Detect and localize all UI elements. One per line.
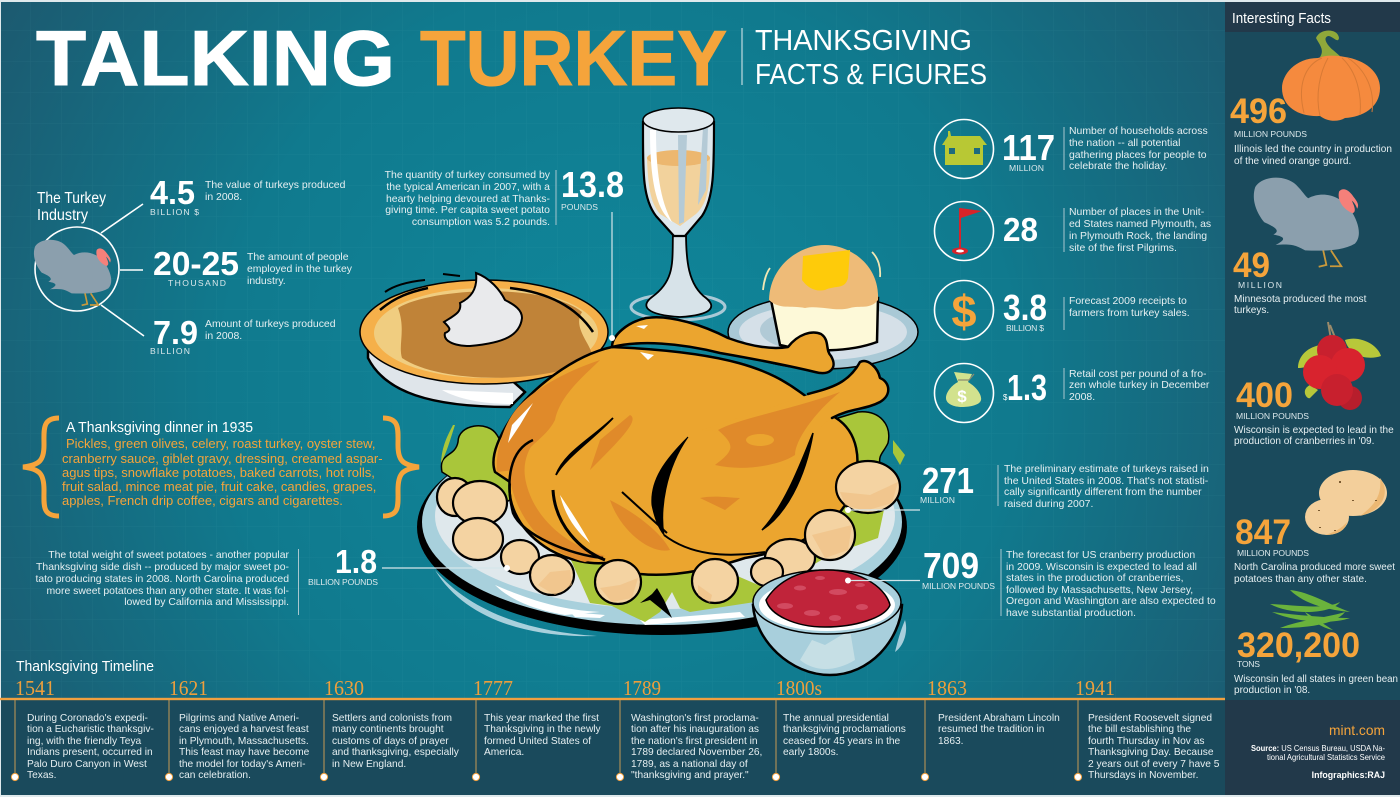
- icon: green beans: [1270, 590, 1350, 630]
- heading: A Thanksgiving dinner in 1935: [66, 419, 253, 436]
- stat: 3.8 billion dollars: [934, 280, 1190, 340]
- entry: 1941: fourth Thursday in Nov as: [1088, 736, 1204, 747]
- stat: 1.3 dollars per pound: Retail cost per pound of a fro-: [1069, 369, 1207, 380]
- stat: 1.8 billion pounds: 1.8: [335, 543, 377, 580]
- entry: 1941: 1941: [1075, 676, 1115, 700]
- stat: 271 million: The preliminary estimate of turkeys raised in: [1004, 464, 1209, 475]
- fact: 320,200 tons: production in '08.: [1234, 685, 1310, 696]
- stat: 7.9 billion: Amount of turkeys produced: [205, 319, 336, 330]
- icon: house: [934, 120, 994, 178]
- entry: 1630: [320, 676, 460, 781]
- stat: 4.5 billion: in 2008.: [205, 192, 242, 203]
- stat: 709 million pounds: states in the production of cranberries,: [1006, 573, 1184, 584]
- entry: 1630: 1630: [324, 676, 364, 700]
- entry: 1800s: thanksgiving proclamations: [783, 724, 906, 735]
- stat: 20-25 thousand: employed in the turkey: [247, 264, 353, 275]
- stat: 28 places named Plymouth: Number of places in the Unit-: [1069, 207, 1205, 218]
- icon: cranberry sauce bowl: [753, 570, 906, 675]
- fact: 847 million pounds: 847: [1235, 513, 1291, 552]
- entry: 1941: [1074, 676, 1220, 781]
- entry: 1863: 1863.: [938, 736, 964, 747]
- entry: 1863: 1863: [927, 676, 967, 700]
- entry: 1789: Washington's first proclama-: [631, 713, 759, 724]
- entry: 1777: 1777: [473, 676, 513, 700]
- stat: 4.5 billion: The value of turkeys produced: [205, 180, 346, 191]
- illustration: turkey dinner: [360, 108, 920, 675]
- source: tional Agricultural Statistics Service: [1267, 752, 1385, 762]
- icon: dollar sign: $: [951, 286, 977, 337]
- stat: 709 million pounds: have substantial production.: [1006, 608, 1136, 619]
- entry: 1777: This year marked the first: [484, 713, 599, 724]
- stat: 13.8 pounds: [385, 164, 624, 228]
- stat: 709 million pounds: 709: [923, 545, 979, 586]
- entry: 1800s: early 1800s.: [783, 747, 838, 758]
- icon: money bag: [934, 364, 994, 422]
- fact: 847 million pounds: MILLION POUNDS: [1237, 548, 1309, 558]
- stat: 271 million: [920, 460, 1209, 510]
- entry: 1621: This feast may have become: [179, 747, 310, 758]
- entry: 1541: [11, 676, 154, 781]
- entry: 1621: the model for today's Ameri-: [179, 759, 306, 770]
- stat: 13.8 pounds: consumption was 5.2 pounds.: [412, 217, 550, 228]
- menu text: agus tips, snowflake potatoes, baked carrots, hot rolls,: [62, 465, 375, 480]
- icon: dollar sign: [934, 280, 994, 340]
- icon: turkey in circle: [34, 204, 144, 336]
- entry: 1541: Palo Duro Canyon in West: [27, 759, 147, 770]
- entry: 1630: many continents brought: [332, 724, 444, 735]
- fact: 400 million pounds: [1234, 376, 1394, 447]
- stat: 1.8 billion pounds: lowed by California and Mississippi.: [124, 597, 289, 608]
- stat: 4.5 billion: 4.5: [150, 174, 195, 211]
- menu text: Pickles, green olives, celery, roast turkey, oyster stew,: [66, 436, 375, 451]
- fact: 320,200 tons: Wisconsin led all states in green bean: [1234, 674, 1398, 685]
- entry: 1941: the bill establishing the: [1088, 724, 1191, 735]
- right brace: [383, 418, 419, 516]
- stat: 709 million pounds: [922, 545, 1216, 619]
- icon: sweet potatoes: [1305, 470, 1387, 535]
- fact: 320,200 tons: [1234, 626, 1398, 696]
- stat: 1.8 billion pounds: BILLION POUNDS: [308, 577, 378, 587]
- stat: 271 million: MILLION: [920, 495, 955, 505]
- fact: 49 million: 49: [1233, 246, 1270, 285]
- panel: credits: [1225, 700, 1400, 795]
- stat: 20-25 thousand: THOUSAND: [168, 278, 226, 288]
- entry: 1541: tion a Eucharistic thanksgiv-: [27, 724, 154, 735]
- menu text: cranberry sauce, giblet gravy, dressing, creamed aspar-: [62, 451, 383, 466]
- fact: 320,200 tons: 320,200: [1237, 626, 1360, 665]
- source: [1251, 743, 1385, 762]
- entry: 1621: cans enjoyed a harvest feast: [179, 724, 309, 735]
- stat: 20-25 thousand: 20-25: [153, 245, 239, 282]
- title: Talking: TALKING: [36, 14, 395, 102]
- stat: 13.8 pounds: The quantity of turkey consumed by: [385, 170, 551, 181]
- stat: 1.8 billion pounds: [35, 543, 378, 615]
- entry: 1789: [616, 676, 762, 781]
- entry: 1789: 1789: [623, 676, 661, 700]
- callout line: 1.8 billion pounds: [382, 565, 510, 571]
- stat: 1.3 dollars per pound: 2008.: [1069, 392, 1095, 403]
- stat: 709 million pounds: MILLION POUNDS: [922, 581, 995, 591]
- entry: 1541: During Coronado's expedi-: [27, 713, 148, 724]
- stat: 3.8 billion dollars: 3.8: [1003, 287, 1047, 328]
- stat: 13.8 pounds: 13.8: [561, 164, 624, 205]
- stat: 3.8 billion dollars: Forecast 2009 receipts to: [1069, 296, 1187, 307]
- stat: 28 places named Plymouth: site of the first Pilgrims.: [1069, 243, 1177, 254]
- stat: 7.9 billion: BILLION: [150, 346, 190, 356]
- stat: 1.3 dollars per pound: $: [1003, 393, 1008, 402]
- stat: 709 million pounds: in 2009. Wisconsin is expected to lead all: [1006, 562, 1197, 573]
- heading second line: Industry: [37, 207, 88, 224]
- stat: 271 million: cally significantly different from the number: [1004, 487, 1202, 498]
- stat: 28 places named Plymouth: in Plymouth Rock, the landing: [1069, 231, 1207, 242]
- entry: 1941: 2 years out of every 7 have 5: [1088, 759, 1220, 770]
- fact: 496 million pounds: 496: [1230, 92, 1287, 131]
- stat: 709 million pounds: Oregon and Washington are also expected to: [1006, 596, 1216, 607]
- entry: 1777: formed United States of: [484, 736, 591, 747]
- entry: 1621: Pilgrims and Native Ameri-: [179, 713, 299, 724]
- stat: 20-25 thousand: [153, 245, 353, 288]
- entry: 1777: [472, 676, 602, 781]
- entry: 1863: [921, 676, 1060, 781]
- stat: 271 million: raised during 2007.: [1004, 499, 1093, 510]
- icon: money bag: $: [957, 387, 967, 406]
- entry: 1630: Settlers and colonists from: [332, 713, 452, 724]
- fact: 49 million: [1233, 246, 1367, 316]
- stat: 7.9 billion: in 2008.: [205, 331, 242, 342]
- stat: 28 places named Plymouth: ed States named Plymouth, as: [1069, 219, 1211, 230]
- stat: 117 million households: celebrate the holiday.: [1069, 161, 1167, 172]
- turkey body: [493, 317, 888, 575]
- stat: 20-25 thousand: industry.: [247, 276, 286, 287]
- stat: 117 million households: MILLION: [1009, 163, 1044, 173]
- source: Source: US Census Bureau, USDA Na-: [1251, 743, 1385, 753]
- fact: 847 million pounds: North Carolina produced more sweet: [1234, 562, 1395, 573]
- entry: 1800s: ceased for 45 years in the: [783, 736, 901, 747]
- entry: 1800s: 1800s: [776, 676, 822, 700]
- shading: [497, 360, 600, 472]
- heading: Interesting Facts: [1232, 11, 1331, 27]
- stat: 4.5 billion: [150, 174, 346, 217]
- callout line: 271 million: [845, 507, 920, 513]
- entry: 1941: Thanksgiving Day. Because: [1088, 747, 1214, 758]
- stat: 13.8 pounds: POUNDS: [561, 202, 598, 212]
- stat: 117 million households: gathering places for people to: [1069, 150, 1207, 161]
- entry: 1541: Indians present, occurred in: [27, 747, 153, 758]
- heading: The Turkey: [37, 190, 106, 207]
- stat: 709 million pounds: The forecast for US cranberry production: [1006, 550, 1195, 561]
- infographics credit: Infographics:RAJ: [1312, 770, 1385, 780]
- callout line: 709 million pounds: [845, 578, 920, 584]
- logo: mint.com: mint.com: [1329, 722, 1385, 738]
- stat: 117 million households: [934, 120, 1208, 178]
- stat: 13.8 pounds: hearty helping devoured at Thanks-: [386, 194, 551, 205]
- stat: 3.8 billion dollars: farmers from turkey sales.: [1069, 308, 1190, 319]
- legs: [612, 317, 834, 373]
- entry: 1800s: The annual presidential: [783, 713, 889, 724]
- stat: 117 million households: 117: [1002, 127, 1055, 168]
- stat: 7.9 billion: 7.9: [153, 314, 198, 351]
- stat: 13.8 pounds: the typical American in 2007, with a: [386, 182, 550, 193]
- icon: pumpkin pie: [360, 273, 608, 407]
- stat: 28 places named Plymouth: [934, 202, 1211, 260]
- stat: 1.8 billion pounds: Thanksgiving side dish -- produced by major sweet po-: [36, 562, 290, 573]
- subtitle line two: FACTS & FIGURES: [755, 59, 987, 91]
- fact: 49 million: Minnesota produced the most: [1234, 294, 1367, 305]
- icon: dinner roll with butter: [728, 245, 918, 369]
- stat: 271 million: 271: [922, 460, 974, 501]
- strokes and highlights: [556, 418, 613, 475]
- entry: 1630: customs of days of prayer: [332, 736, 449, 747]
- entry: 1621: can celebration.: [179, 770, 251, 781]
- fact: 847 million pounds: potatoes than any other state.: [1234, 574, 1367, 585]
- entry: 1789: 1789 declared November 26,: [631, 747, 762, 758]
- entry: 1789: tion after his inauguration as: [631, 724, 759, 735]
- icon: cranberries: [1298, 322, 1381, 410]
- heading: Thanksgiving Timeline: [16, 659, 154, 675]
- fact: 49 million: MILLION: [1238, 280, 1282, 290]
- fact: 496 million pounds: [1230, 92, 1392, 167]
- entry: 1621: in Plymouth, Massachusetts.: [179, 736, 309, 747]
- entry: 1621: 1621: [169, 676, 208, 700]
- left brace: [23, 418, 59, 516]
- entry: 1777: Thanksgiving in the newly: [484, 724, 602, 735]
- panel: interesting facts sidebar: [1225, 2, 1400, 700]
- stat: 28 places named Plymouth: 28: [1003, 211, 1038, 248]
- panel: the turkey industry: [34, 174, 353, 356]
- icon: turkey: [1254, 178, 1359, 267]
- stat: 4.5 billion: BILLION $: [150, 207, 199, 217]
- stat: 1.3 dollars per pound: [934, 364, 1210, 422]
- stat: 1.3 dollars per pound: 1.3: [1007, 367, 1047, 408]
- potatoes: [437, 461, 900, 604]
- icon: wine glass: [631, 108, 725, 320]
- lettuce: [441, 412, 905, 622]
- entry: 1789: 1789, as a national day of: [631, 759, 748, 770]
- stat: 20-25 thousand: The amount of people: [247, 252, 349, 263]
- fact: 320,200 tons: TONS: [1237, 659, 1260, 669]
- fact: 496 million pounds: Illinois led the country in production: [1234, 144, 1392, 155]
- entry: 1541: 1541: [15, 676, 55, 700]
- entry: 1789: "thanksgiving and prayer.": [631, 770, 749, 781]
- stat: 1.8 billion pounds: more sweet potatoes than any other state. It was fol-: [46, 586, 290, 597]
- fact: 400 million pounds: MILLION POUNDS: [1236, 411, 1309, 421]
- entry: 1541: ing, with the friendly Teya: [27, 736, 142, 747]
- title: [36, 14, 987, 102]
- entry: 1621: [165, 676, 310, 781]
- fact: 400 million pounds: 400: [1236, 376, 1293, 415]
- menu text: apples, French drip coffee, cigars and cigarettes.: [62, 493, 343, 508]
- fact: 400 million pounds: production of cranberries in '09.: [1234, 436, 1374, 447]
- icon: pumpkin: [1282, 30, 1380, 121]
- callout line: 13.8 pounds: [609, 212, 615, 341]
- stat: 7.9 billion: [150, 314, 336, 356]
- entry: 1800s: [772, 676, 906, 781]
- icon: flag: [934, 202, 994, 260]
- subtitle line one: THANKSGIVING: [755, 25, 972, 57]
- stat: 1.8 billion pounds: The total weight of sweet potatoes - another popular: [48, 550, 290, 561]
- fact: 400 million pounds: Wisconsin is expected to lead in the: [1234, 425, 1394, 436]
- stat: 13.8 pounds: giving time. Per capita sweet potato: [385, 205, 550, 216]
- icon: platter: [417, 419, 907, 636]
- entry: 1541: Texas.: [27, 770, 56, 781]
- entry: 1941: President Roosevelt signed: [1088, 713, 1212, 724]
- entry: 1863: resumed the tradition in: [938, 724, 1044, 735]
- menu text: fruit salad, mince meat pie, fruit cake, candies, grapes,: [62, 479, 376, 494]
- stat: 1.8 billion pounds: tato producing states in 2008. North Carolina produced: [35, 574, 289, 585]
- entry: 1777: America.: [484, 747, 524, 758]
- fact: 847 million pounds: [1234, 513, 1395, 585]
- stat: 709 million pounds: followed by Massachusetts, New Jersey,: [1006, 585, 1193, 596]
- entry: 1789: the nation's first president in: [631, 736, 758, 747]
- entry: 1941: Thursdays in November.: [1088, 770, 1198, 781]
- entry: 1630: in New England.: [332, 759, 406, 770]
- title: Turkey: TURKEY: [420, 14, 727, 102]
- entry: 1863: President Abraham Lincoln: [938, 713, 1060, 724]
- fact: 49 million: turkeys.: [1234, 305, 1269, 316]
- panel: Thanksgiving timeline: [0, 659, 1225, 795]
- entry: 1630: and thanksgiving, especially: [332, 747, 460, 758]
- fact: 496 million pounds: of the vined orange gourd.: [1234, 156, 1351, 167]
- stat: 3.8 billion dollars: BILLION $: [1006, 323, 1044, 333]
- stat: 1.3 dollars per pound: zen whole turkey in December: [1069, 380, 1210, 391]
- menu text: [62, 436, 383, 508]
- stat: 117 million households: Number of households across: [1069, 126, 1208, 137]
- panel: a Thanksgiving dinner in 1935: [23, 418, 419, 516]
- fact: 496 million pounds: MILLION POUNDS: [1234, 129, 1307, 139]
- stat: 117 million households: the nation -- all potential: [1069, 138, 1180, 149]
- stat: 271 million: the United States in 2008. That's not statisti-: [1004, 476, 1209, 487]
